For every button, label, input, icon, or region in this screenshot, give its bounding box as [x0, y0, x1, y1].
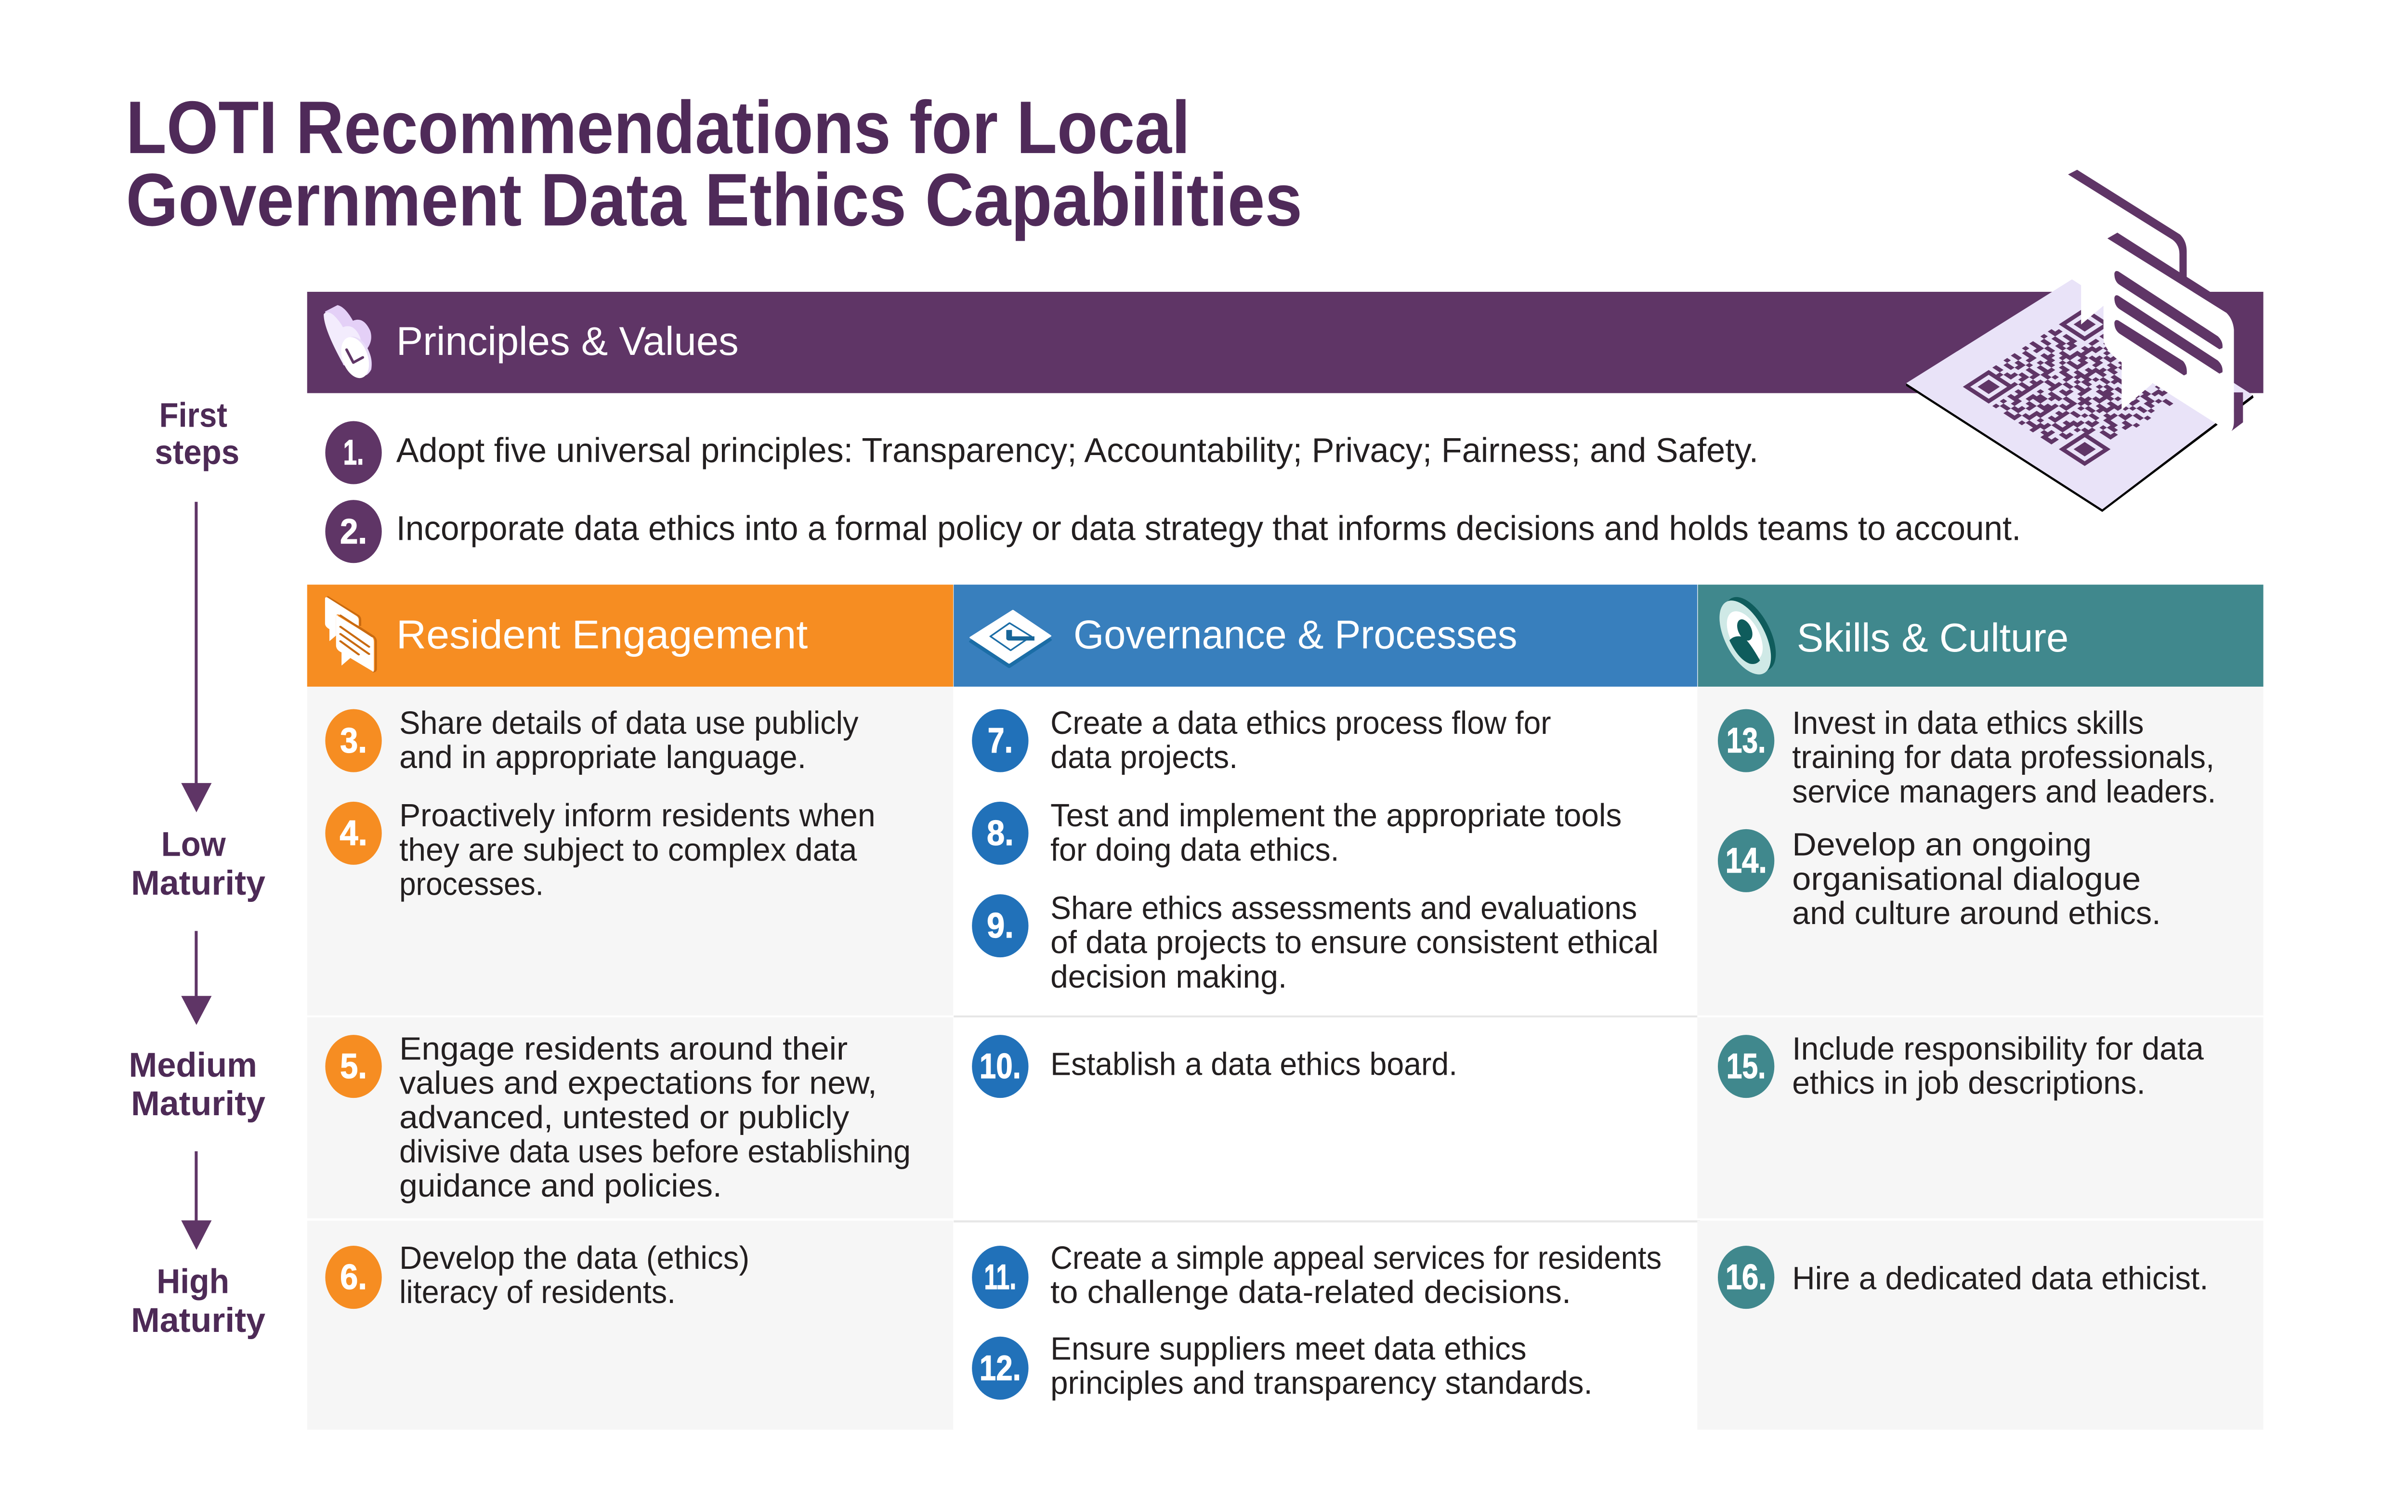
item 11: Create a simple appeal services for residents — [1050, 1240, 1662, 1276]
item 13: service managers and leaders. — [1792, 774, 2216, 809]
item 15: ethics in job descriptions. — [1792, 1066, 2146, 1101]
item 8: Test and implement the appropriate tools — [1050, 798, 1622, 834]
icon: cloud with clock — [324, 305, 376, 381]
panel: principles and values header band — [307, 292, 2264, 393]
title: Government Data Ethics Capabilities — [126, 158, 1302, 242]
item 3: 3. — [340, 720, 367, 760]
item 4: 4. — [340, 813, 367, 853]
item 4: Proactively inform residents when — [399, 798, 876, 834]
item 6: literacy of residents. — [399, 1275, 676, 1310]
item 11: 11. — [984, 1257, 1016, 1297]
label: first steps — [155, 396, 239, 471]
item 12: principles and transparency standards. — [1050, 1366, 1593, 1401]
label: high maturity: High — [157, 1263, 229, 1301]
item 13: 13. — [1727, 720, 1766, 760]
item 16: 16. — [1726, 1257, 1767, 1297]
item 4: processes. — [399, 867, 544, 902]
item 3 — [325, 705, 859, 775]
item 6 — [325, 1240, 749, 1310]
label: medium maturity: Maturity — [131, 1085, 265, 1123]
item 9: of data projects to ensure consistent ethical — [1050, 925, 1659, 960]
item 1: universal principles: Adopt five universal principles: Transparency; Accountability; Privacy; Fairness; and Safety. — [396, 431, 1758, 469]
item 3: Share details of data use publicly — [399, 705, 859, 741]
label: first steps: First — [159, 396, 227, 434]
illustration: QR code paper with speech bubbles — [1906, 170, 2253, 512]
arrow: low to medium maturity — [181, 931, 211, 1025]
heading: skills and culture: Skills & Culture — [1797, 615, 2068, 660]
item 5: values and expectations for new, — [399, 1066, 877, 1101]
item 14: and culture around ethics. — [1792, 896, 2161, 931]
item 2: formal policy: 2. — [340, 511, 367, 551]
arrow: medium to high maturity — [181, 1151, 211, 1250]
item 9: decision making. — [1050, 959, 1287, 995]
icon: person badge — [1709, 593, 1786, 679]
item 2: formal policy: Incorporate data ethics into a formal policy or data strategy that informs decisions and holds teams to account. — [396, 509, 2021, 547]
icon: diamond clock — [970, 611, 1050, 667]
title — [126, 86, 1302, 242]
header: resident engagement — [307, 585, 953, 687]
item 5: advanced, untested or publicly — [399, 1100, 850, 1135]
item 12: Ensure suppliers meet data ethics — [1050, 1331, 1527, 1367]
item 6: Develop the data (ethics) — [399, 1240, 749, 1276]
heading: principles and values: Principles & Values — [396, 318, 739, 364]
item 7: 7. — [988, 720, 1013, 760]
item 14: Develop an ongoing — [1792, 827, 2092, 862]
item 8: 8. — [987, 813, 1014, 853]
item 15 — [1718, 1031, 2204, 1101]
item 4: they are subject to complex data — [399, 832, 857, 868]
heading: resident engagement: Resident Engagement — [396, 612, 808, 657]
item 5: Engage residents around their — [399, 1031, 848, 1067]
item 10: 10. — [980, 1046, 1021, 1086]
item 13 — [1718, 705, 2216, 809]
item 13: Invest in data ethics skills — [1792, 705, 2144, 741]
item 11 — [972, 1240, 1662, 1310]
item 14: organisational dialogue — [1792, 861, 2141, 897]
item 1: universal principles: 1. — [343, 432, 364, 472]
heading: governance and processes: Governance & Processes — [1073, 612, 1518, 657]
item 15: Include responsibility for data — [1792, 1031, 2204, 1067]
item 1: universal principles — [325, 421, 1758, 484]
label: medium maturity: Medium — [129, 1046, 257, 1084]
header: skills and culture — [1698, 585, 2264, 687]
item 14: 14. — [1726, 841, 1767, 880]
panel: governance and processes column — [954, 585, 1700, 1401]
item 7: Create a data ethics process flow for — [1050, 705, 1551, 741]
item 5: divisive data uses before establishing — [399, 1134, 911, 1170]
panel: skills and culture column — [1697, 585, 2264, 1430]
item 8 — [972, 798, 1622, 868]
label: high maturity: Maturity — [131, 1302, 265, 1340]
title: LOTI Recommendations for Local — [126, 86, 1190, 169]
item 8: for doing data ethics. — [1050, 832, 1339, 868]
item 15: 15. — [1727, 1046, 1766, 1086]
item 12 — [972, 1331, 1593, 1401]
item 11: to challenge data-related decisions. — [1050, 1275, 1571, 1310]
header: governance and processes — [954, 585, 1697, 687]
item 14 — [1718, 827, 2161, 931]
panel: resident engagement column — [307, 585, 953, 1430]
item 4 — [325, 798, 876, 902]
item 6: 6. — [340, 1257, 367, 1297]
item 7 — [972, 705, 1551, 775]
item 12: 12. — [980, 1348, 1021, 1388]
item 10 — [972, 1035, 1457, 1098]
item 9: Share ethics assessments and evaluations — [1050, 890, 1637, 926]
label: medium maturity — [129, 1046, 265, 1123]
item 9 — [972, 890, 1659, 995]
arrow: first steps to low maturity — [181, 502, 211, 812]
label: low maturity: Low — [161, 826, 226, 864]
item 7: data projects. — [1050, 740, 1238, 775]
label: high maturity — [131, 1263, 265, 1340]
label: first steps: steps — [155, 433, 239, 471]
item 5: 5. — [340, 1046, 367, 1086]
label: low maturity — [131, 826, 265, 902]
icon: speech bubbles — [325, 597, 376, 672]
item 16: Hire a dedicated data ethicist. — [1792, 1261, 2208, 1296]
item 5 — [325, 1031, 911, 1204]
item 2: formal policy — [325, 500, 2021, 563]
item 5: guidance and policies. — [399, 1168, 722, 1204]
item 10: Establish a data ethics board. — [1050, 1046, 1457, 1082]
item 13: training for data professionals, — [1792, 740, 2214, 775]
item 3: and in appropriate language. — [399, 740, 806, 775]
item 16 — [1718, 1246, 2208, 1309]
item 9: 9. — [987, 906, 1014, 945]
label: low maturity: Maturity — [131, 864, 265, 902]
